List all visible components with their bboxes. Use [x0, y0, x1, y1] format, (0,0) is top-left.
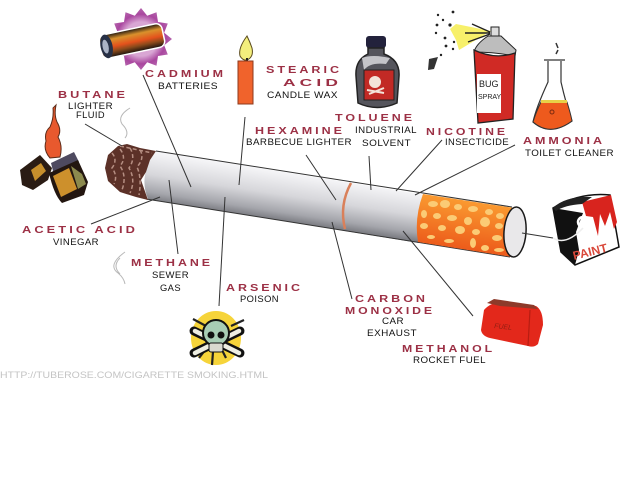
label: acetic acid: VINEGAR: [53, 237, 99, 247]
paint label: PAINT: [571, 241, 609, 263]
spray mist: [450, 24, 491, 50]
lighter lid: [20, 155, 52, 190]
label: stearic acid: ACID: [283, 77, 342, 89]
icon: paint can: [553, 195, 619, 265]
lighter top: [51, 152, 79, 175]
label: stearic acid: [266, 64, 342, 100]
label: acetic acid: ACETIC ACID: [22, 224, 138, 236]
label: methanol: [402, 343, 495, 365]
icon: lighter: [20, 105, 88, 203]
icon: battery: [98, 8, 172, 70]
icon: flask: [533, 43, 572, 129]
label: butane: BUTANE: [58, 89, 128, 101]
label: acetic acid: [22, 224, 138, 247]
skull: [203, 320, 229, 346]
label: nicotine: NICOTINE: [426, 126, 508, 138]
cigarette: [105, 144, 528, 258]
leader lines: [85, 75, 553, 316]
spray nozzle: [491, 27, 499, 36]
icon: fuel can: FUEL: [494, 323, 512, 332]
filter speckles: [420, 200, 504, 252]
label: toluene: INDUSTRIAL: [355, 125, 417, 135]
filter: [417, 194, 514, 257]
label: cadmium: CADMIUM: [145, 68, 226, 80]
label: arsenic: ARSENIC: [226, 282, 303, 294]
label: ammonia: TOILET CLEANER: [525, 148, 614, 158]
label: butane: [58, 89, 128, 120]
label: carbon monoxide: CARBON: [355, 293, 428, 305]
source url: HTTP://TUBEROSE.COM/CIGARETTE SMOKING.HTML: [0, 370, 268, 381]
icon: fuel can: [481, 299, 543, 347]
crossbones: [194, 331, 240, 353]
lighter body: [49, 160, 88, 203]
label: arsenic: [226, 282, 303, 304]
label: arsenic: POISON: [240, 294, 279, 304]
battery starburst: [110, 8, 172, 70]
icon: bug spray: SPRAY: [478, 94, 502, 101]
label: methanol: ROCKET FUEL: [413, 355, 486, 365]
cigarette paper: [144, 151, 425, 243]
label: stearic acid: STEARIC: [266, 64, 342, 76]
skull burst: [191, 311, 241, 365]
cigarette mouth end: [502, 206, 528, 258]
label: toluene: SOLVENT: [362, 138, 411, 148]
label: methane: METHANE: [131, 257, 213, 269]
icon: sewer gas wisps: [114, 252, 125, 284]
label: butane: LIGHTER: [68, 101, 113, 111]
burnt tobacco tip: [105, 144, 156, 200]
icon: smoke wisp from cigarette: [121, 108, 130, 138]
cigarette outline: [146, 151, 512, 257]
label: cadmium: BATTERIES: [158, 81, 218, 91]
label: hexamine: BARBECUE LIGHTER: [246, 137, 352, 147]
label: nicotine: [426, 126, 509, 147]
lighter flame: [45, 105, 61, 158]
spray can shoulder: [474, 36, 516, 56]
icon: bug spray: [428, 11, 516, 123]
label: butane: FLUID: [76, 110, 105, 120]
icon: candle: [238, 36, 253, 104]
insect particles: [435, 11, 455, 56]
label: methane: [131, 257, 213, 293]
label: methane: GAS: [160, 283, 181, 293]
label: carbon monoxide: MONOXIDE: [345, 305, 435, 317]
fly: [428, 57, 438, 70]
icon: toluene bottle: [356, 36, 399, 108]
label: toluene: [335, 112, 417, 148]
icon: bug spray: BUG: [479, 79, 499, 89]
toluene red label: [364, 70, 394, 100]
label: ammonia: [523, 135, 614, 158]
label: nicotine: INSECTICIDE: [445, 137, 509, 147]
label: methane: SEWER: [152, 270, 189, 280]
label: toluene: TOLUENE: [335, 112, 415, 124]
label: carbon monoxide: CAR: [382, 316, 404, 326]
icon: skull and crossbones: [191, 311, 244, 365]
filter band: [343, 183, 351, 229]
spray label: [477, 74, 501, 113]
label: hexamine: HEXAMINE: [255, 125, 345, 137]
label: hexamine: [246, 125, 352, 147]
label: cadmium: [145, 68, 226, 91]
label: carbon monoxide: [345, 293, 435, 338]
battery body: [98, 23, 166, 59]
label: methanol: METHANOL: [402, 343, 495, 355]
label: carbon monoxide: EXHAUST: [367, 328, 417, 338]
spray can body: [474, 50, 515, 123]
label: stearic acid: CANDLE WAX: [267, 90, 338, 100]
label: ammonia: AMMONIA: [523, 135, 605, 147]
